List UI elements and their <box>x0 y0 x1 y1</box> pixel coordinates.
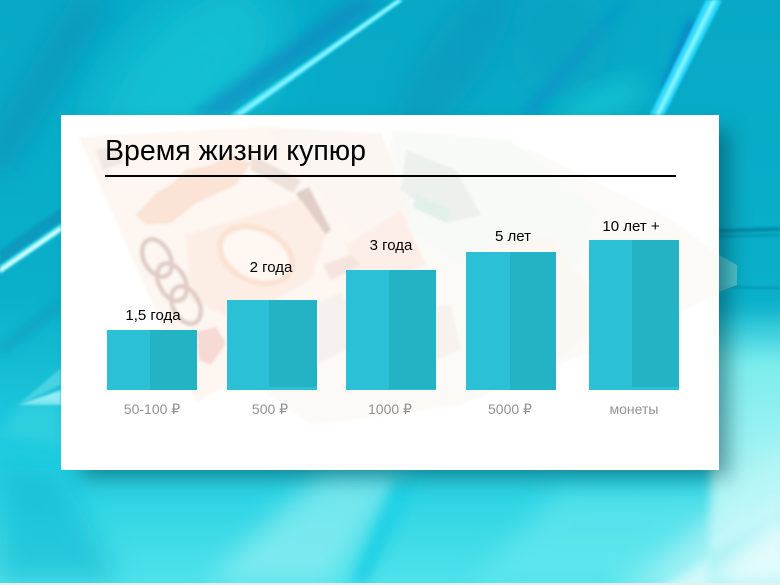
bar chart: banknote lifespan <box>107 218 679 417</box>
value label: 2 years: 2 года <box>250 259 292 276</box>
title rule <box>105 175 676 177</box>
bar: 50-100 rubles <box>107 330 197 390</box>
panel: white chart card <box>61 115 719 470</box>
bar: 1000 rubles <box>346 270 436 390</box>
value label: 10+ years: 10 лет + <box>602 218 660 235</box>
bar: 5000 rubles <box>466 252 556 390</box>
category label: 500 rubles: 500 ₽ <box>252 401 288 417</box>
category label: 50-100 rubles: 50-100 ₽ <box>124 401 180 417</box>
value label: 5 years: 5 лет <box>495 228 531 245</box>
title: Время жизни купюр <box>105 135 366 167</box>
bar: 500 rubles <box>227 300 317 390</box>
value label: 1,5 years: 1,5 года <box>125 307 181 324</box>
bar: coins <box>589 240 679 390</box>
category label: coins: монеты <box>610 401 658 417</box>
card shadow <box>80 130 728 477</box>
value label: 3 years: 3 года <box>370 237 412 254</box>
category label: 1000 rubles: 1000 ₽ <box>368 401 412 417</box>
illustration: faded ruble banknotes <box>80 128 589 400</box>
category label: 5000 rubles: 5000 ₽ <box>488 401 532 417</box>
banknote edge behind card <box>719 255 737 292</box>
